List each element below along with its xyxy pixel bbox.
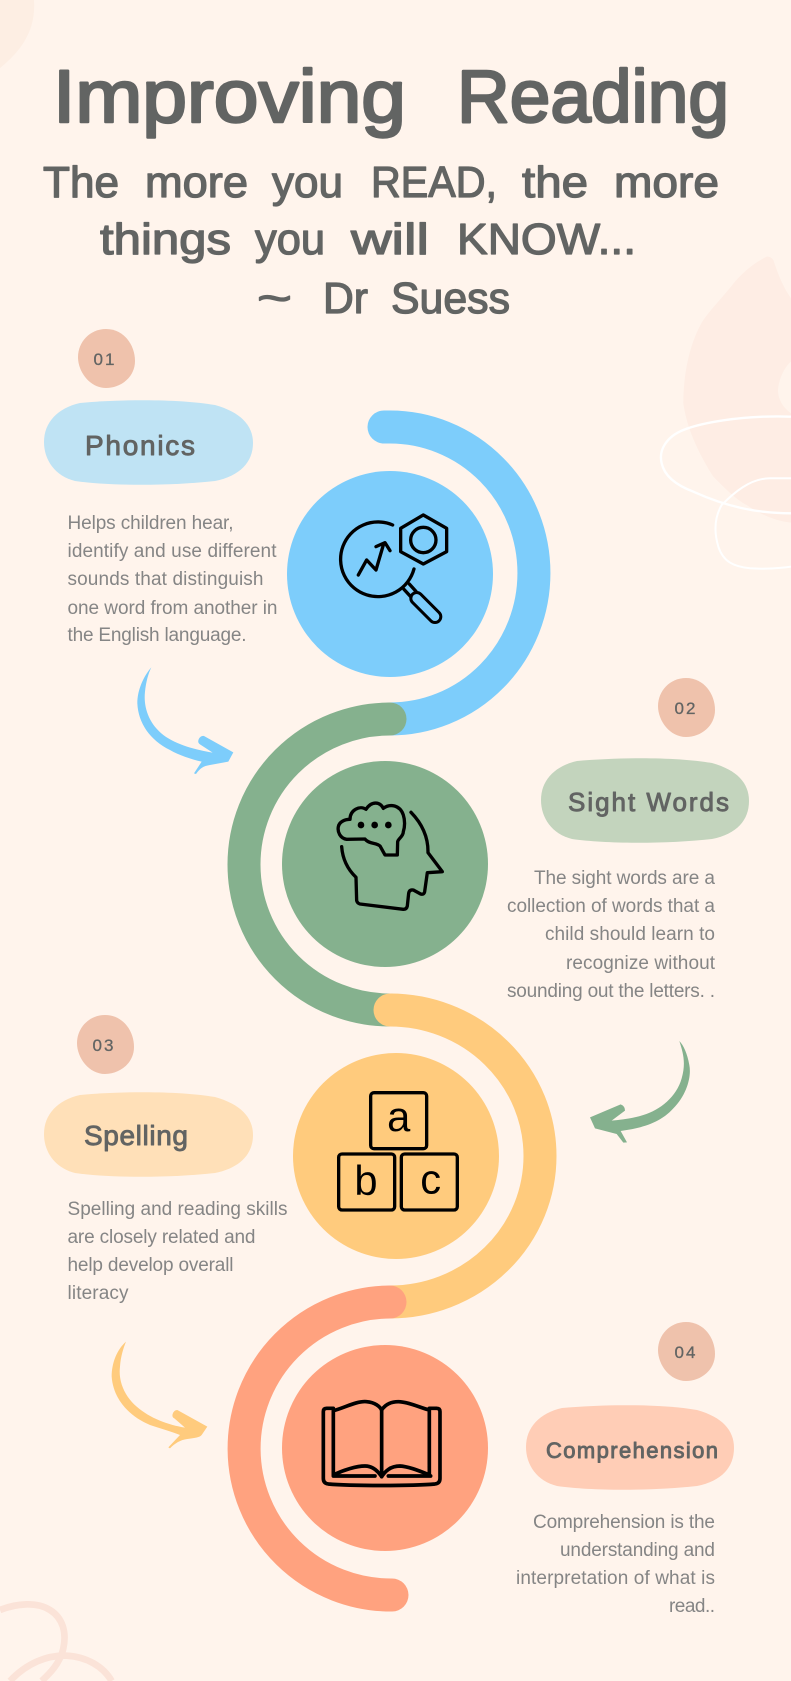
icon: abc blocks: c: [420, 1155, 441, 1202]
text: Comprehension description: read..: [669, 1596, 715, 1617]
text: Phonics description: [68, 513, 278, 646]
subtitle quote: more: [614, 158, 719, 207]
decoration: top left blob: [0, 0, 34, 68]
decoration: bottom left swirls: [0, 1604, 112, 1681]
circle: orange: [282, 1345, 488, 1551]
text: Spelling description: are closely related and: [68, 1227, 256, 1248]
decoration: right blob and white loops: [661, 257, 791, 569]
arc: orange: [244, 1302, 392, 1595]
text: Sight Words description: The sight words are a: [534, 868, 715, 889]
arc: blue: [384, 427, 534, 719]
badge: 03: [77, 1015, 134, 1074]
arrow: blue: [137, 667, 233, 774]
subtitle quote: KNOW...: [457, 215, 636, 264]
pill: Spelling: Spelling: [84, 1120, 188, 1151]
icon: open book: [323, 1402, 440, 1485]
subtitle quote: [43, 158, 719, 323]
text: Spelling description: Spelling and reading skills: [68, 1199, 288, 1220]
circle: green: [282, 761, 488, 967]
subtitle quote: READ,: [371, 158, 497, 207]
text: Phonics description: one word from another in: [68, 598, 278, 619]
text: Comprehension description: [516, 1512, 715, 1617]
subtitle quote: you: [255, 215, 325, 264]
text: Spelling description: literacy: [68, 1283, 129, 1304]
pill: Sight Words: [541, 758, 749, 843]
badge: 03: 03: [93, 1036, 115, 1055]
badge: 01: 01: [94, 350, 116, 369]
subtitle quote: ~: [257, 274, 292, 323]
icon: magnifier with chart and hexagon: [341, 515, 447, 617]
text: Spelling description: [68, 1199, 288, 1304]
pill: Comprehension: [526, 1405, 734, 1490]
arrow: green: [590, 1041, 690, 1143]
text: Comprehension description: understanding and: [560, 1540, 715, 1561]
title: Improving: [53, 55, 406, 138]
icon: abc blocks: b: [354, 1157, 378, 1204]
text: Spelling description: help develop overall: [68, 1255, 234, 1276]
text: Phonics description: the English language.: [68, 625, 246, 646]
subtitle quote: more: [145, 158, 248, 207]
circle: blue: [287, 471, 493, 677]
text: Sight Words description: [507, 868, 716, 1002]
badge: 01: [78, 329, 135, 388]
badge: 02: [658, 678, 715, 737]
badge: 04: 04: [675, 1343, 697, 1362]
subtitle quote: will: [350, 215, 429, 264]
pill: Comprehension: Comprehension: [546, 1438, 718, 1463]
badge: 02: 02: [675, 699, 697, 718]
text: Phonics description: Helps children hear,: [68, 513, 234, 534]
icon: abc blocks: a: [387, 1093, 411, 1140]
pill: Phonics: [44, 400, 253, 485]
icon: head with thought bubble: [338, 803, 442, 909]
text: Comprehension description: interpretation of what is: [516, 1568, 715, 1589]
subtitle quote: things: [100, 215, 231, 264]
text: Sight Words description: child should learn to: [545, 924, 715, 945]
text: Phonics description: sounds that distinguish: [68, 569, 264, 590]
subtitle quote: Dr: [323, 274, 368, 323]
text: Sight Words description: collection of words that a: [507, 896, 715, 917]
arc: green: [244, 719, 390, 1010]
subtitle quote: you: [272, 158, 343, 207]
badge: 04: [658, 1322, 715, 1381]
text: Sight Words description: sounding out the letters. .: [507, 981, 715, 1002]
text: Comprehension description: Comprehension is the: [533, 1512, 715, 1533]
title: [53, 55, 729, 138]
subtitle quote: The: [43, 158, 119, 207]
subtitle quote: the: [522, 158, 588, 207]
arrow: yellow: [112, 1342, 207, 1448]
pill: Sight Words: Sight Words: [568, 787, 729, 817]
subtitle quote: Suess: [391, 274, 510, 323]
arc: yellow: [390, 1010, 540, 1302]
text: Phonics description: identify and use different: [68, 541, 277, 562]
pill: Phonics: Phonics: [85, 430, 195, 461]
icon: abc blocks: [339, 1093, 457, 1210]
pill: Spelling: [44, 1092, 253, 1177]
circle: yellow: [293, 1053, 499, 1259]
text: Sight Words description: recognize without: [566, 953, 716, 974]
title: Reading: [457, 55, 729, 138]
